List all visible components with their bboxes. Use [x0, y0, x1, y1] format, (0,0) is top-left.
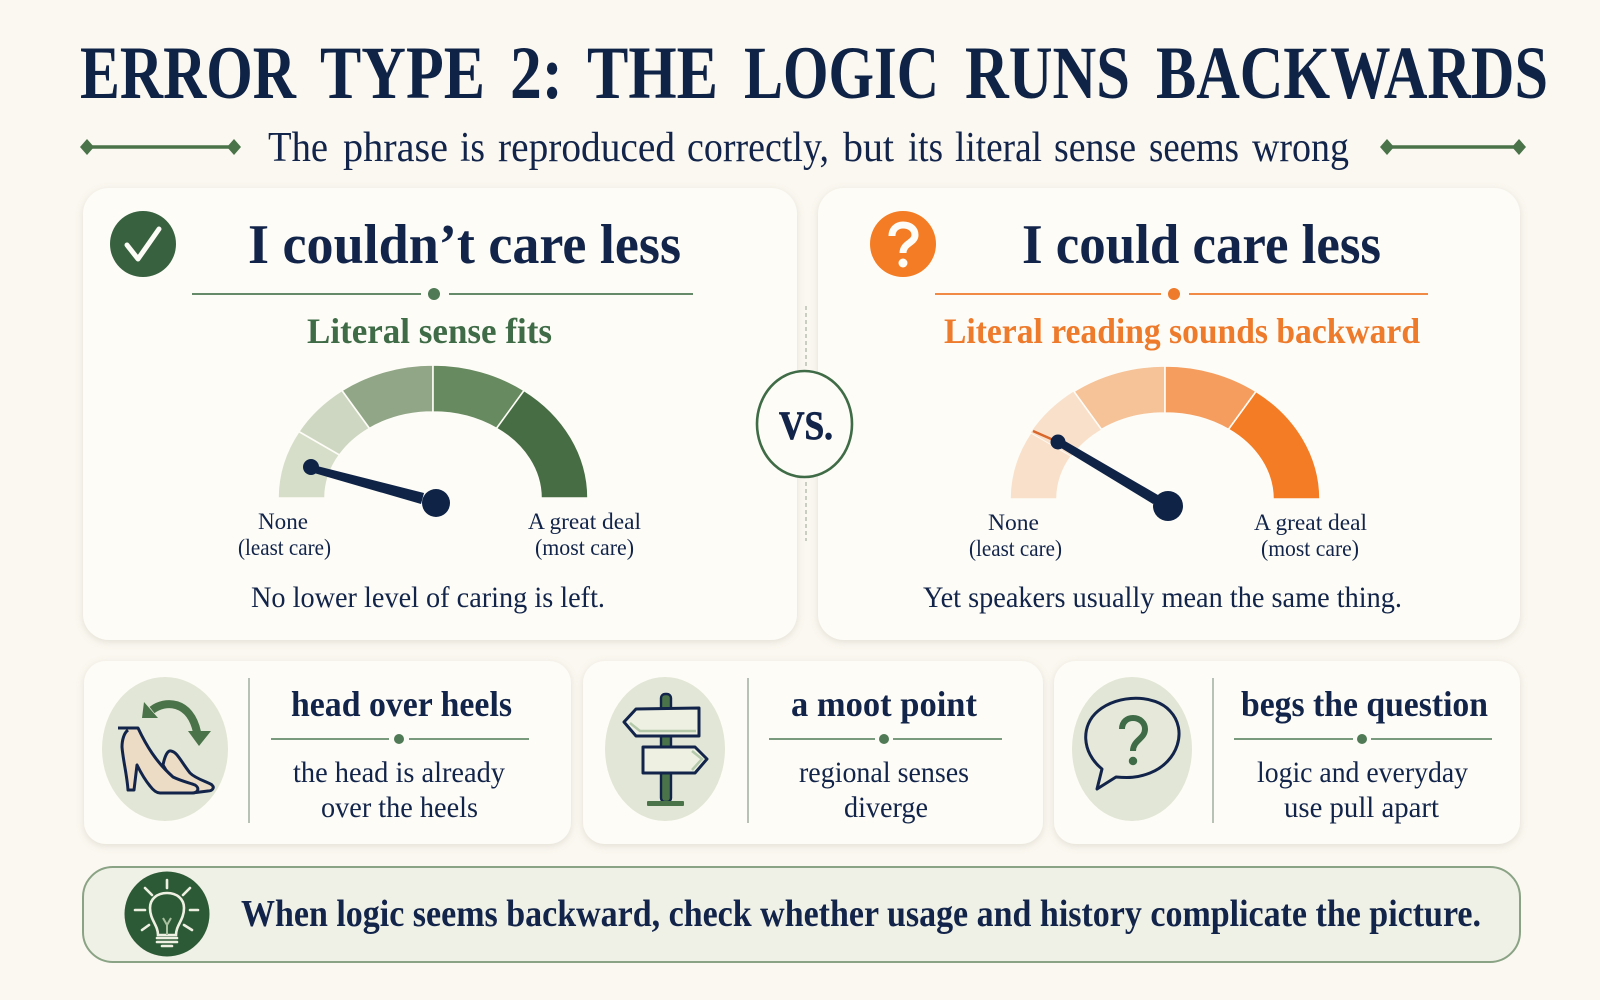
- heading: I could care less: I could care less: [1022, 214, 1381, 276]
- heading: head over heels: head over heels: [291, 684, 512, 724]
- subtitle: is: [460, 125, 485, 171]
- gauge labels: (least care): [238, 535, 331, 560]
- gauge labels: A great deal: [528, 509, 641, 534]
- icon: check mark: [110, 211, 176, 277]
- panel: begs the question: [1054, 661, 1520, 844]
- title: 2:: [510, 32, 563, 115]
- title: [80, 32, 1548, 115]
- subtitle: seems: [1149, 125, 1239, 171]
- panel: I couldn't care less: [83, 188, 797, 640]
- body text: over the heels: [321, 791, 478, 824]
- subtitle: literal: [955, 125, 1042, 171]
- gauge labels: [238, 509, 641, 560]
- gauge labels: (most care): [1261, 536, 1359, 561]
- gauge: backward reading: [1010, 366, 1320, 521]
- heading: begs the question: begs the question: [1241, 684, 1488, 724]
- body text: regional senses: [799, 756, 969, 789]
- subtitle: sense: [1054, 125, 1136, 171]
- panel: I could care less: [818, 188, 1520, 640]
- body text: the head is already: [293, 756, 505, 789]
- title: TYPE: [320, 32, 485, 115]
- body text: [293, 756, 505, 824]
- gauge labels: None: [258, 509, 308, 534]
- body text: logic and everyday: [1257, 756, 1468, 789]
- subtitle: reproduced: [498, 125, 675, 171]
- subtitle: wrong: [1252, 125, 1349, 171]
- body text: [1257, 756, 1468, 824]
- subtitle: but: [843, 125, 894, 171]
- gauge labels: None: [988, 510, 1039, 535]
- gauge labels: A great deal: [1254, 510, 1367, 535]
- icon: shoes with arrow: [118, 702, 213, 793]
- versus badge: VS.: [779, 403, 833, 448]
- subtitle: correctly,: [687, 125, 829, 171]
- title: RUNS: [965, 32, 1130, 115]
- gauge labels: [969, 510, 1367, 561]
- heading: a moot point: a moot point: [791, 684, 977, 724]
- subheading: literal sense fits: Literal sense fits: [307, 311, 552, 351]
- title: LOGIC: [744, 32, 939, 115]
- subtitle: [80, 125, 1526, 171]
- gauge labels: (most care): [535, 535, 634, 560]
- panel: a moot point: [583, 661, 1043, 844]
- panel: head over heels: [84, 661, 571, 844]
- heading: I couldn't care less: I couldn’t care less: [248, 214, 681, 276]
- icon: signpost: [624, 694, 707, 806]
- subtitle: The: [268, 125, 328, 171]
- takeaway banner: [83, 867, 1520, 962]
- versus badge: [757, 306, 852, 541]
- icon: light bulb: [124, 872, 210, 956]
- caption: No lower level of caring is left.: [251, 581, 605, 614]
- icon: speech bubble question: [1086, 698, 1179, 789]
- subtitle: phrase: [343, 125, 448, 171]
- icon: question mark: [870, 211, 936, 277]
- gauge labels: (least care): [969, 536, 1062, 561]
- takeaway text: When logic seems backward, check whether usage and history complicate the picture.: [241, 893, 1481, 935]
- body text: [799, 756, 969, 824]
- body text: use pull apart: [1284, 791, 1440, 824]
- subtitle: its: [908, 125, 943, 171]
- subheading: literal reading sounds backward: Literal reading sounds backward: [944, 311, 1420, 351]
- caption: Yet speakers usually mean the same thing.: [923, 581, 1402, 614]
- body text: diverge: [844, 791, 928, 824]
- gauge: low care reading: [278, 365, 588, 517]
- needle: [1050, 434, 1183, 521]
- title: ERROR: [80, 32, 297, 115]
- needle: [303, 459, 450, 517]
- title: THE: [587, 32, 718, 115]
